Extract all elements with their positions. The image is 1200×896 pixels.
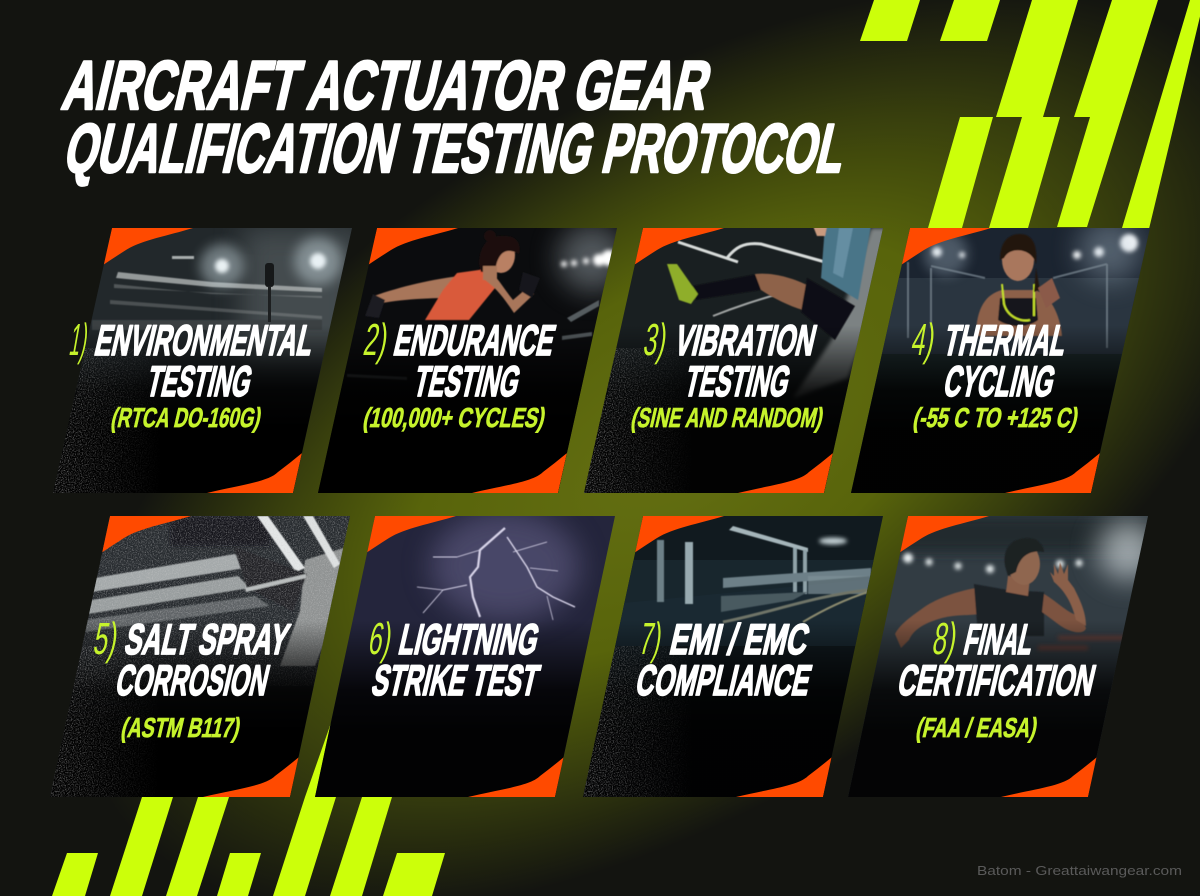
label: 6) <box>365 613 396 664</box>
panel: 4 thermal cycling <box>851 228 1150 493</box>
label <box>632 613 816 705</box>
panel: 6 lightning strike test <box>315 516 615 797</box>
label: ENDURANCE <box>390 317 560 365</box>
footer credit: Batom - Greattaiwangear.com <box>977 864 1182 878</box>
photo: lightning in purple sky <box>315 516 615 797</box>
label: (FAA / EASA) <box>914 712 1041 743</box>
panel: 5 salt spray corrosion <box>40 516 360 806</box>
label: THERMAL <box>940 317 1072 365</box>
photo: concrete parking structure <box>573 516 893 806</box>
label <box>894 613 1100 743</box>
label: STRIKE TEST <box>368 657 544 705</box>
label <box>90 613 294 743</box>
label: COMPLIANCE <box>632 657 816 705</box>
label: VIBRATION <box>671 317 821 365</box>
photo: male sprinter <box>838 516 1158 806</box>
corner accents <box>366 516 564 797</box>
top right lime stripes <box>860 0 1200 308</box>
label: TESTING <box>143 358 257 406</box>
photo: female sprinter <box>307 224 627 498</box>
label: TESTING <box>681 358 795 406</box>
label: 1) <box>66 314 92 365</box>
label: CYCLING <box>940 358 1060 406</box>
bottom left lime stripes <box>52 720 445 896</box>
label: 3) <box>640 314 671 365</box>
label: 8) <box>929 613 961 664</box>
label <box>629 314 827 433</box>
corner accents <box>103 228 302 493</box>
photo: stadium with floodlights <box>42 228 362 498</box>
corner accents <box>101 516 299 797</box>
label: 4) <box>908 314 939 365</box>
label: LIGHTNING <box>395 616 544 664</box>
label: ENVIRONMENTAL <box>91 317 319 365</box>
label <box>360 314 560 433</box>
title <box>57 47 854 187</box>
photo: leaping runner <box>573 226 893 498</box>
label: SALT SPRAY <box>121 616 294 664</box>
label: (SINE AND RANDOM) <box>629 402 827 433</box>
corner accents <box>899 516 1097 797</box>
label: 2) <box>360 314 392 365</box>
corner accents <box>901 228 1100 493</box>
label <box>908 314 1082 433</box>
label: 5) <box>90 613 122 664</box>
corner accents <box>634 516 832 797</box>
label: CORROSION <box>112 657 274 705</box>
label: TESTING <box>410 358 525 406</box>
panel: 3 vibration testing <box>573 226 893 498</box>
corner accents <box>368 228 567 493</box>
photo: female athlete in stadium <box>851 228 1150 493</box>
photo: salt spray nozzle <box>40 516 360 806</box>
label: 7) <box>636 613 666 664</box>
panel: 8 final certification <box>838 516 1158 806</box>
label: EMI / EMC <box>666 616 814 664</box>
title: AIRCRAFT ACTUATOR GEAR <box>57 47 718 124</box>
panel: 1 environmental testing <box>42 228 362 498</box>
label: (100,000+ CYCLES) <box>361 402 549 433</box>
label: (RTCA DO-160G) <box>109 402 265 433</box>
panel: 2 endurance testing <box>307 224 627 498</box>
label <box>66 314 319 433</box>
label: FINAL <box>960 616 1039 664</box>
label <box>365 613 544 705</box>
label: (ASTM B117) <box>119 712 244 743</box>
label: (-55 C TO +125 C) <box>911 402 1082 433</box>
corner accents <box>634 228 833 493</box>
panel: 7 emi / emc compliance <box>573 516 893 806</box>
